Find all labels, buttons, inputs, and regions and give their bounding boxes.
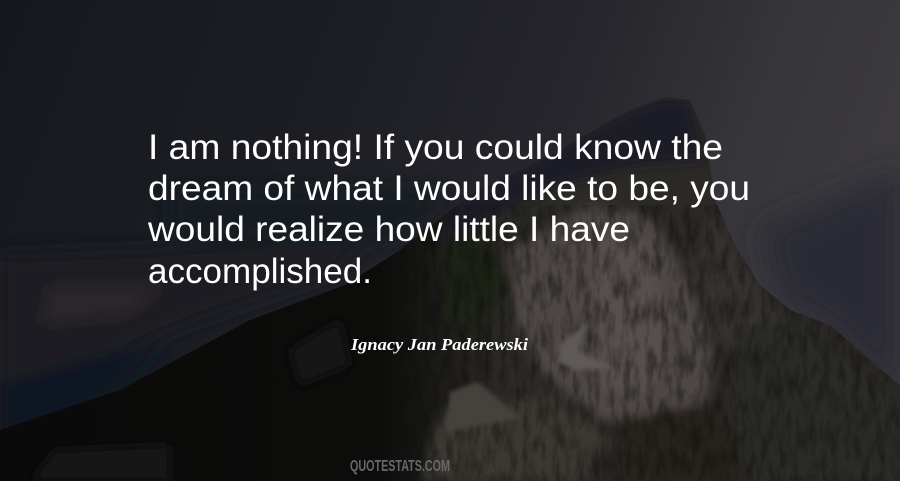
background: distant sea on the right	[760, 170, 900, 400]
author name: Ignacy Jan Paderewski	[350, 335, 528, 354]
forest patches	[40, 448, 166, 478]
quote line 2: dream of what I would like to be, you	[148, 169, 750, 208]
pale rock streak	[558, 322, 615, 370]
quote line 4: accomplished.	[148, 252, 372, 291]
lit rock faces	[510, 205, 715, 420]
shadowed summit	[440, 97, 705, 245]
foreground boulder	[445, 382, 520, 432]
quote line 1: I am nothing! If you could know the	[148, 128, 723, 167]
quote text	[147, 128, 750, 291]
quote line 3: would realize how little I have	[147, 210, 630, 249]
background: coastal town and shore	[0, 190, 450, 450]
rock texture	[400, 205, 900, 481]
watermark: QUOTESTATS.COM	[350, 458, 450, 475]
